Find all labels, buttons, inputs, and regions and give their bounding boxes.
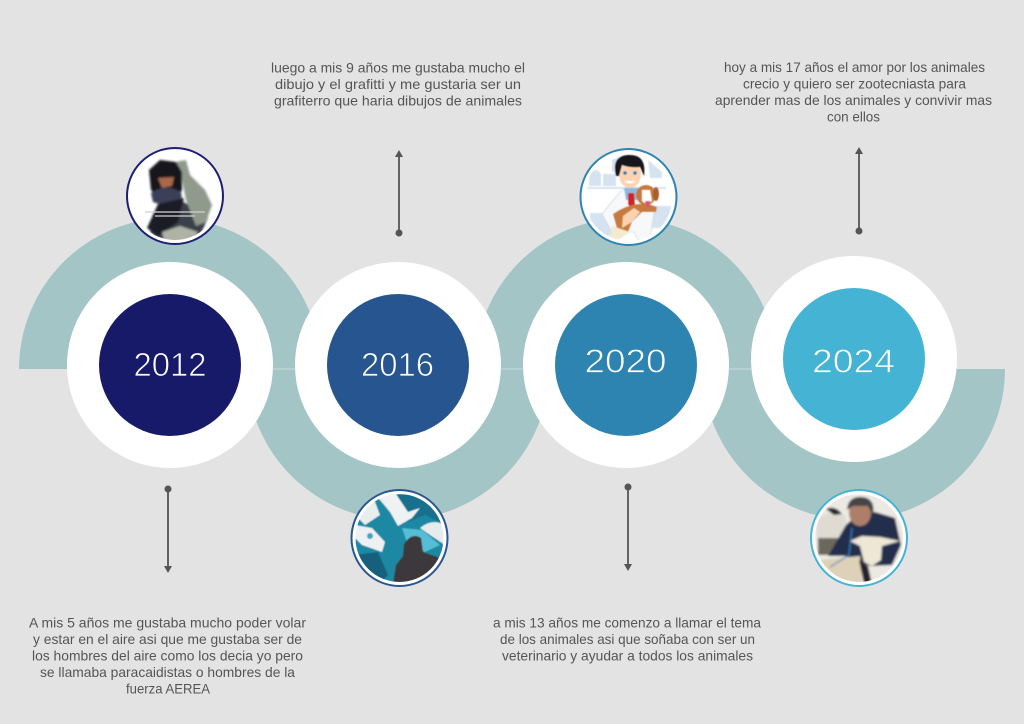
photo: soldier in flight gear xyxy=(127,148,223,244)
text block: 2012: y estar en el aire asi que me gustaba ser de xyxy=(33,632,302,647)
text block: 2016: dibujo y el grafitti y me gustaria ser un xyxy=(275,77,521,92)
text block: 2016 xyxy=(271,60,525,108)
photo: graffiti mural xyxy=(352,490,448,586)
text block: 2012: los hombres del aire como los decia yo pero xyxy=(32,648,303,664)
arrow: 2024 pointing up xyxy=(855,147,863,234)
text block: 2012: A mis 5 años me gustaba mucho poder volar xyxy=(29,616,306,630)
text block: 2024: con ellos xyxy=(827,110,880,124)
year node 2012 xyxy=(67,262,273,468)
text block: 2024: crecio y quiero ser zootecniasta para xyxy=(743,76,966,92)
text block: 2020: de los animales asi que soñaba con ser un xyxy=(500,632,755,647)
photo: veterinarian holding a puppy xyxy=(580,149,676,245)
arrow: 2012 pointing down xyxy=(164,486,172,573)
year node 2024: 2024 xyxy=(812,344,895,380)
arrow: 2016 pointing up xyxy=(395,150,403,236)
text block: 2024: aprender mas de los animales y convivir mas xyxy=(715,93,992,108)
text block: 2016: grafiterro que haria dibujos de animales xyxy=(274,94,522,108)
photo: student examining a sheep xyxy=(811,490,907,586)
year node 2016: 2016 xyxy=(361,347,434,384)
text block: 2024: hoy a mis 17 años el amor por los animales xyxy=(724,60,985,75)
text block: 2020 xyxy=(493,616,761,664)
text block: 2016: luego a mis 9 años me gustaba mucho el xyxy=(271,60,525,76)
text block: 2012 xyxy=(29,616,306,696)
text block: 2020: veterinario y ayudar a todos los animales xyxy=(502,648,753,664)
timeline ribbon of alternating arcs xyxy=(19,218,1005,520)
text block: 2020: a mis 13 años me comenzo a llamar el tema xyxy=(493,616,761,630)
photo caption xyxy=(145,212,205,216)
year node 2012: 2012 xyxy=(134,347,206,384)
year node 2020: 2020 xyxy=(584,344,666,380)
text block: 2024 xyxy=(715,60,992,124)
text block: 2012: fuerza AEREA xyxy=(126,682,211,696)
year node 2024 xyxy=(751,256,957,462)
year node 2020 xyxy=(523,262,729,468)
text block: 2012: se llamaba paracaidistas o hombres de la xyxy=(40,665,295,680)
arrow: 2020 pointing down xyxy=(624,484,632,571)
year node 2016 xyxy=(295,262,501,468)
